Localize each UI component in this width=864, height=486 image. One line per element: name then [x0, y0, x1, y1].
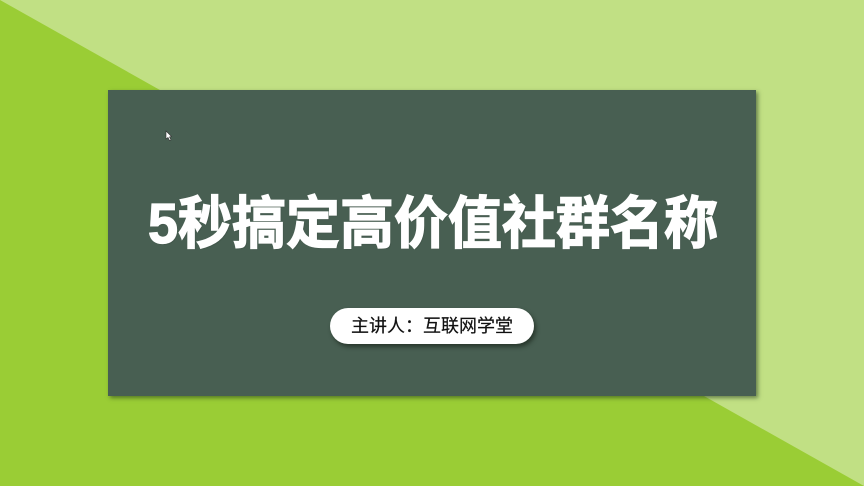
presenter label pill: 主讲人：互联网学堂 — [351, 316, 513, 336]
presenter label pill — [330, 308, 534, 344]
panel: dark green title card — [108, 90, 756, 396]
icon: mouse cursor — [166, 130, 172, 141]
title: 5秒搞定高价值社群名称 — [148, 192, 718, 256]
